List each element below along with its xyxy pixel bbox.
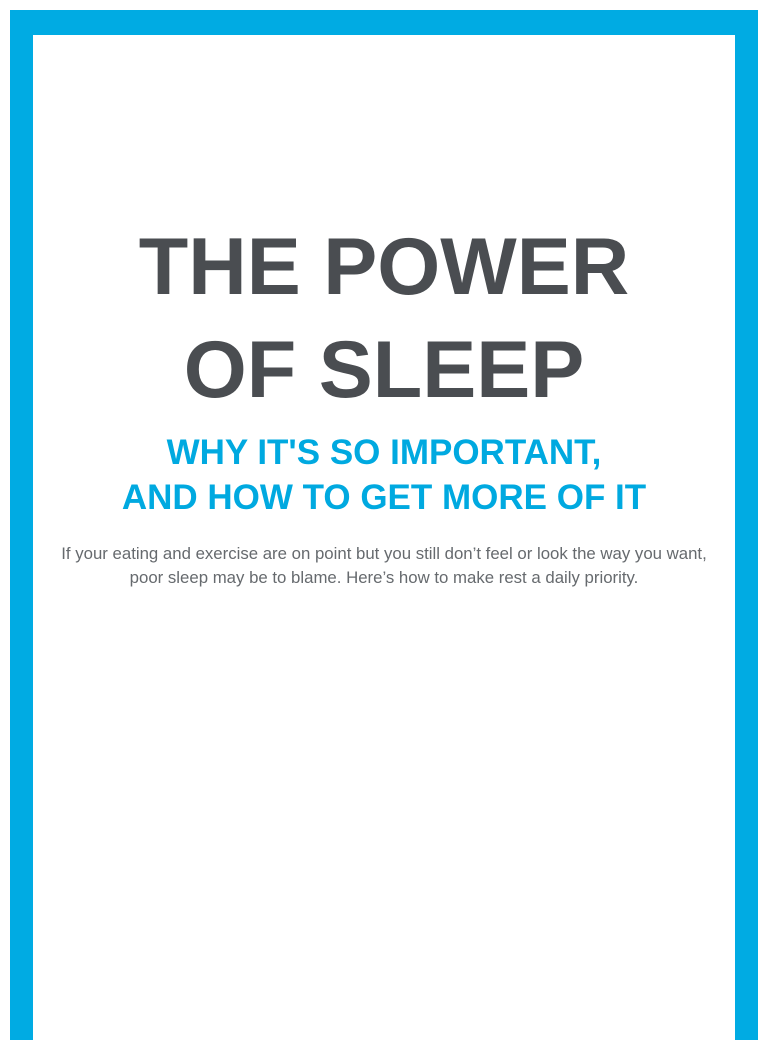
intro text: If your eating and exercise are on point but you still don’t feel or look the way you want, [61, 544, 707, 563]
subtitle: WHY IT'S SO IMPORTANT, [167, 433, 601, 472]
subtitle [122, 433, 646, 517]
intro text [61, 544, 707, 587]
title: OF SLEEP [184, 325, 584, 415]
title [139, 222, 629, 415]
title: THE POWER [139, 222, 629, 312]
intro text: poor sleep may be to blame. Here’s how to make rest a daily priority. [130, 568, 638, 587]
subtitle: AND HOW TO GET MORE OF IT [122, 478, 646, 517]
